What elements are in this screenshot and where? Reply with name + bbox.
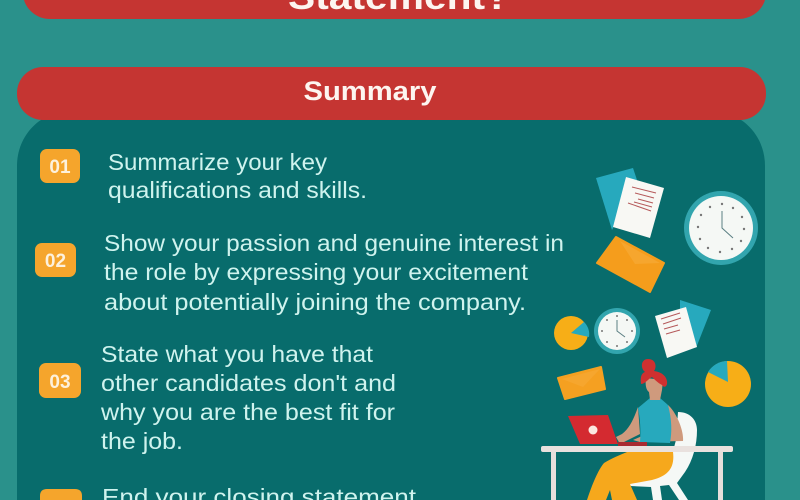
- item 02: the role by expressing your excitement: [104, 259, 529, 285]
- neck and face: [646, 378, 663, 400]
- laptop: [568, 415, 618, 444]
- icon: large clock: [684, 191, 758, 265]
- item 02: about potentially joining the company.: [104, 289, 526, 315]
- panel: summary content background: [17, 110, 765, 500]
- heading: summary: Summary: [304, 76, 436, 106]
- item 01: 01: [49, 157, 71, 178]
- icon: small pie chart: [554, 316, 589, 350]
- item 01: qualifications and skills.: [108, 177, 367, 203]
- torso: [638, 398, 671, 443]
- item 03: the job.: [101, 428, 183, 454]
- item 03: [39, 341, 396, 454]
- icon: large envelope: [597, 237, 664, 292]
- arms: [616, 407, 640, 444]
- desk top: [541, 446, 733, 452]
- item 02: Show your passion and genuine interest in: [104, 230, 564, 256]
- item 03: 03: [49, 372, 71, 393]
- desk legs: [551, 450, 556, 500]
- illustration: woman at desk with laptop: [541, 359, 733, 500]
- hair: [641, 359, 667, 387]
- trousers: [587, 452, 673, 500]
- chair: [630, 412, 697, 500]
- heading: summary: [17, 67, 766, 120]
- item 01: [40, 149, 367, 203]
- title banner: [24, 0, 765, 19]
- item 02: 02: [45, 251, 66, 272]
- icon: small clock: [594, 308, 640, 354]
- icon: large pie chart: [705, 361, 751, 407]
- icon: large document: [596, 168, 664, 238]
- item 03: State what you have that: [101, 341, 374, 367]
- icon: small envelope: [558, 367, 605, 399]
- icon: small document: [655, 300, 711, 358]
- item 01: Summarize your key: [108, 149, 328, 175]
- item 03: why you are the best fit for: [100, 399, 395, 425]
- item 02: [35, 230, 564, 315]
- item 03: other candidates don't and: [101, 370, 396, 396]
